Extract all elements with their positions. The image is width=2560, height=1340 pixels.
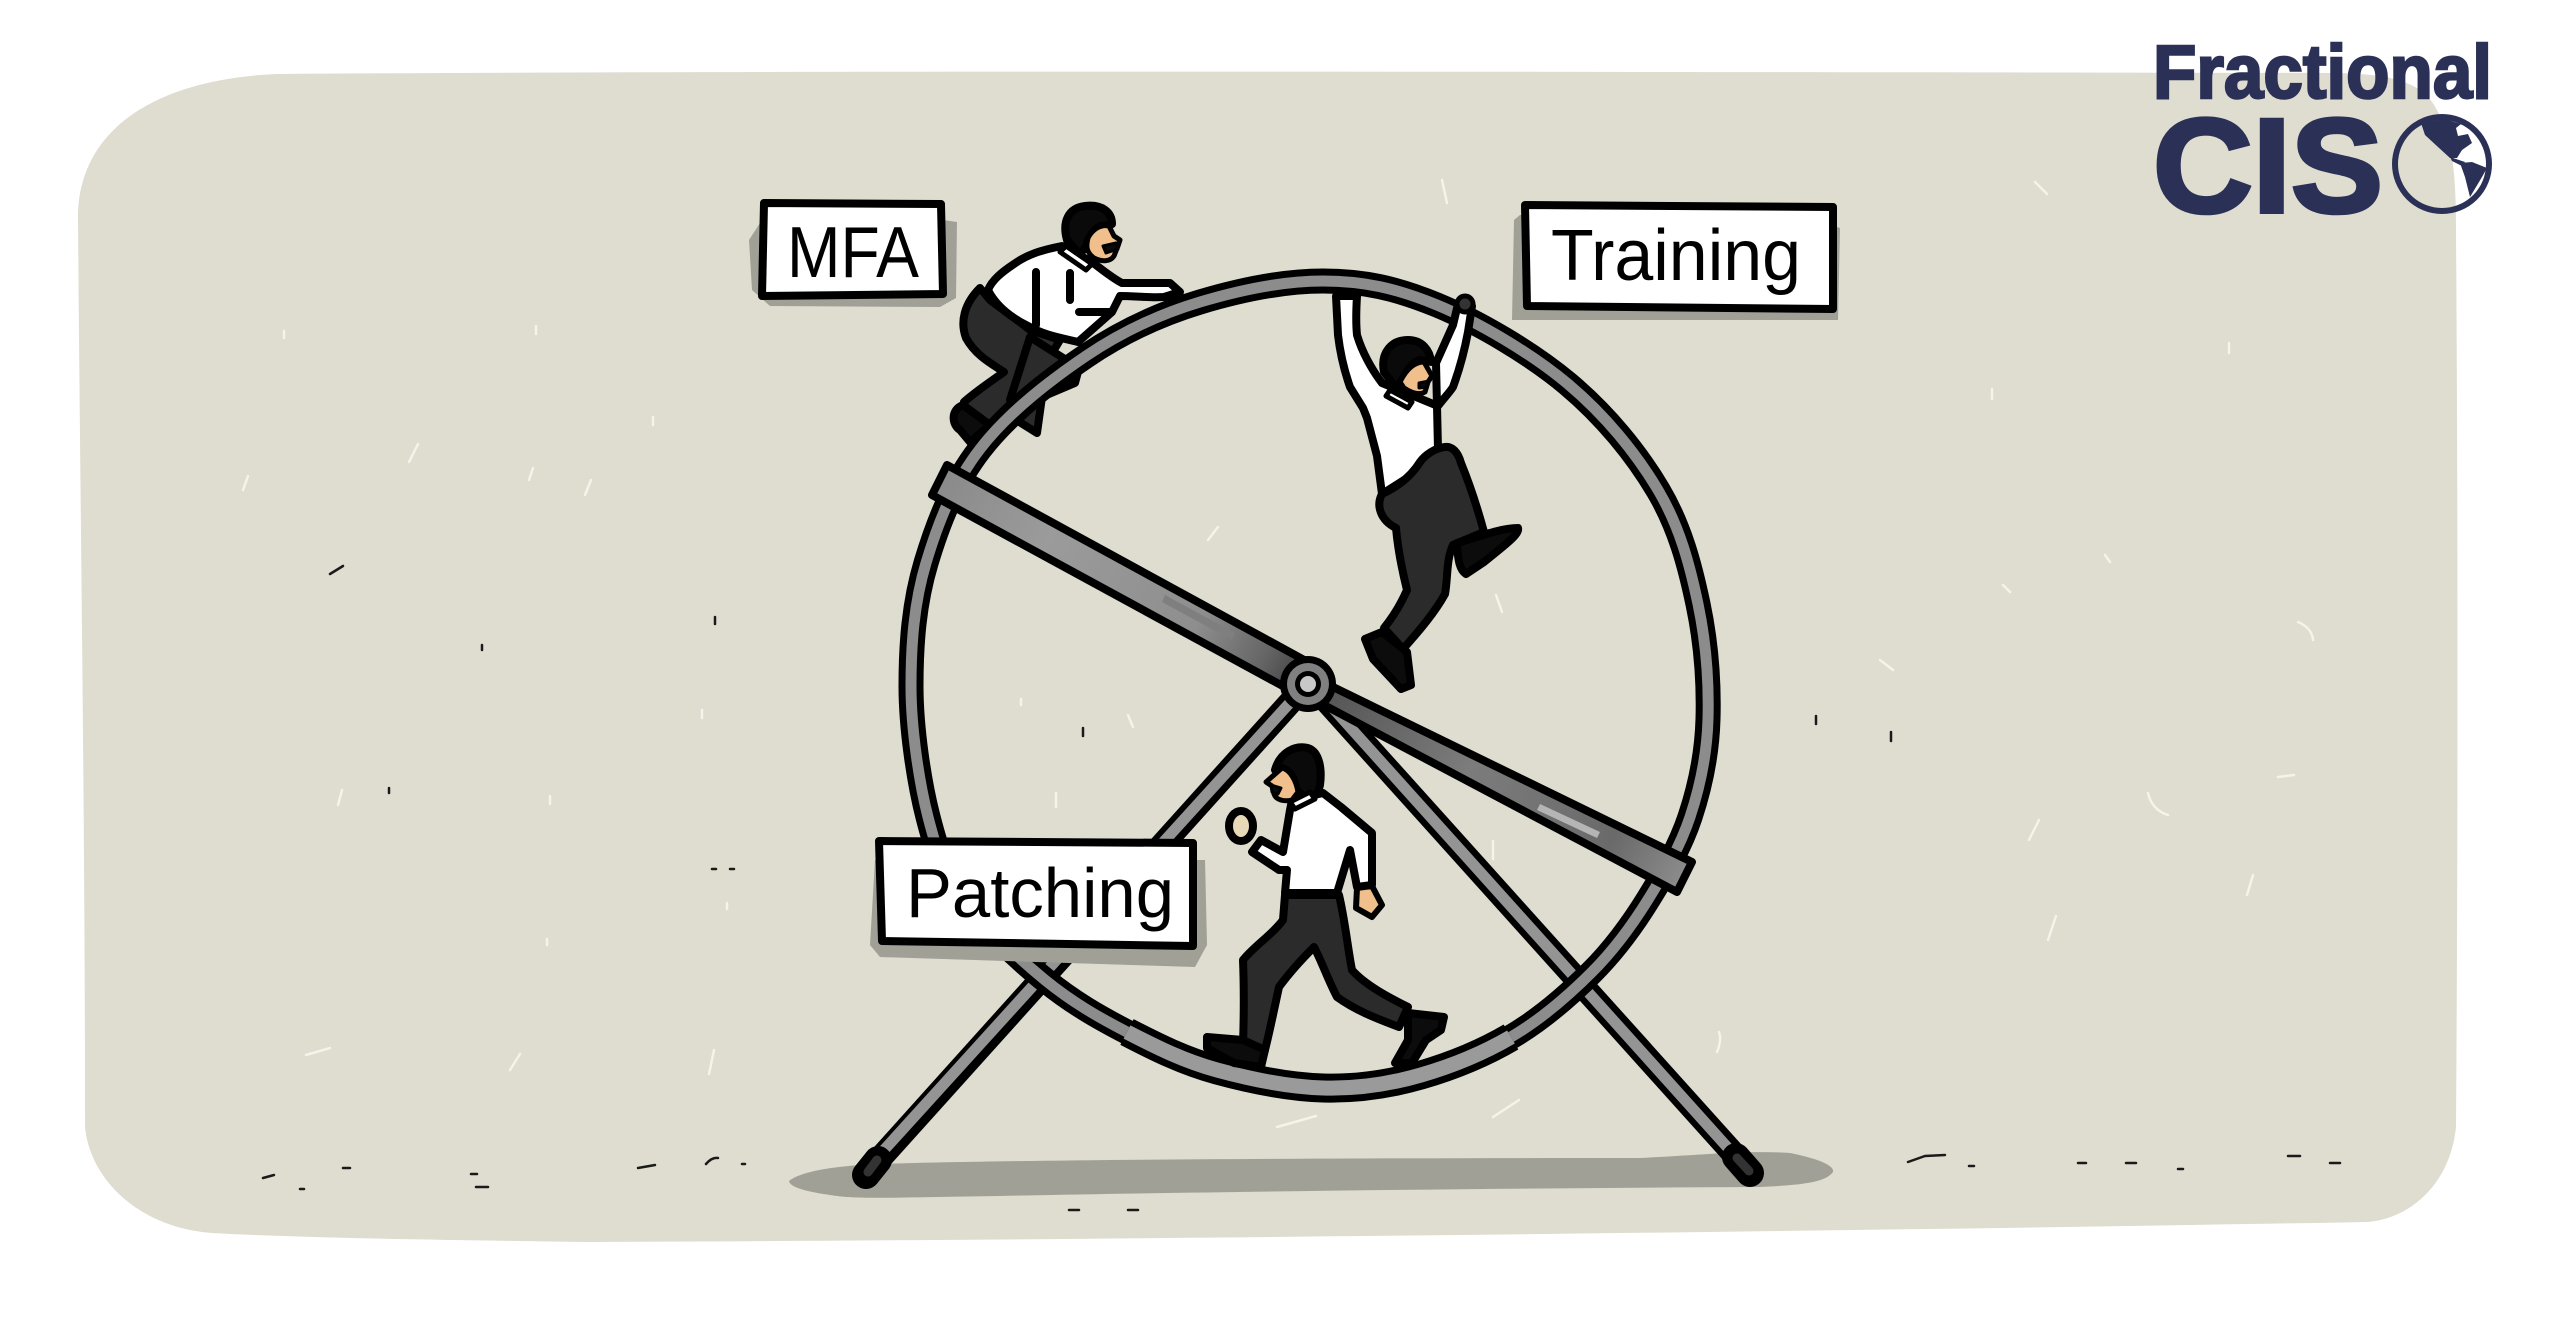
wheel stand: two legs bbox=[866, 696, 1750, 1175]
texture: dark ground specks bbox=[263, 566, 2340, 1210]
logo: Fractional CISO: CIS bbox=[2153, 92, 2383, 241]
texture: white flecks bbox=[243, 180, 2313, 1127]
label: Patching: Patching bbox=[906, 854, 1174, 932]
label: Patching bbox=[870, 841, 1207, 967]
wheel crossbar bbox=[932, 465, 1692, 892]
logo: Fractional CISO: Fractional bbox=[2153, 30, 2492, 115]
label: MFA bbox=[749, 203, 957, 307]
label: Training: Training bbox=[1551, 216, 1801, 296]
ground shadow bbox=[789, 1152, 1833, 1198]
label: MFA: MFA bbox=[787, 213, 919, 293]
figure: man running at bottom of wheel bbox=[1207, 747, 1444, 1067]
logo: Fractional CISO bbox=[2153, 30, 2492, 241]
figure: man climbing on top of wheel bbox=[954, 206, 1180, 442]
wheel hub bbox=[1280, 656, 1336, 712]
wheel ring bbox=[911, 281, 1708, 1088]
figure: man hanging from wheel bbox=[1336, 296, 1518, 689]
label: Training bbox=[1512, 205, 1840, 320]
